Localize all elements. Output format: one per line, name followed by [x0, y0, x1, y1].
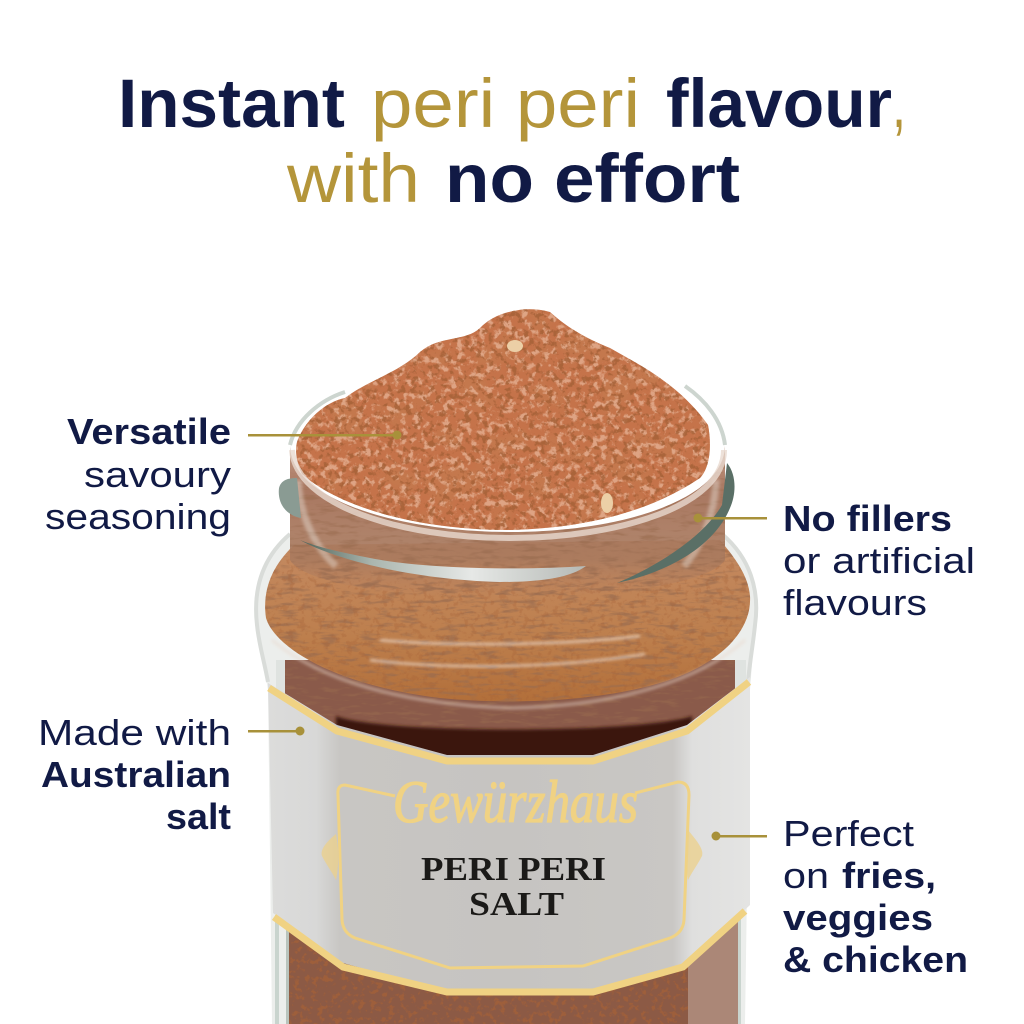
spice mound	[296, 309, 710, 530]
jar neck	[290, 445, 725, 598]
jar label: SALT	[469, 886, 564, 923]
callout: versatile: Versatile	[67, 411, 231, 452]
title: no effort	[445, 140, 740, 217]
spice jar	[250, 309, 770, 1024]
callout: versatile	[45, 411, 402, 537]
callout: no fillers: No fillers	[783, 498, 952, 539]
product name: PERI PERI	[421, 851, 606, 888]
title: with	[286, 140, 420, 217]
callout: versatile: seasoning	[45, 496, 231, 537]
callout: no fillers: flavours	[783, 582, 927, 623]
label ornaments	[322, 830, 702, 880]
label gold bands	[269, 682, 749, 992]
jar label	[268, 677, 750, 992]
callout: versatile: savoury	[84, 454, 231, 495]
title: flavour	[666, 65, 892, 142]
callout: no fillers	[694, 498, 975, 623]
callout: perfect on: on	[783, 855, 829, 896]
callout: no fillers: or artificial	[783, 540, 975, 581]
jar lower body	[250, 530, 770, 1024]
callout: perfect on: Perfect	[783, 813, 914, 854]
neck threads	[279, 463, 735, 583]
title: Instant	[118, 65, 345, 142]
title: ,	[892, 65, 906, 142]
callout: perfect on	[712, 813, 968, 980]
jar glass outline	[256, 534, 756, 708]
callout: australian salt	[38, 712, 304, 837]
back rim	[290, 386, 725, 445]
brand script: Gewürzhaus	[393, 769, 638, 835]
glass rim	[292, 450, 724, 538]
callout: australian salt: Australian	[41, 754, 231, 795]
callout: perfect on: fries,	[842, 855, 936, 896]
callout: perfect on: & chicken	[783, 939, 968, 980]
title: peri peri	[371, 65, 640, 142]
callout: australian salt: salt	[166, 796, 231, 837]
callout: perfect on: veggies	[783, 897, 933, 938]
label inner frame	[338, 782, 689, 968]
callout: australian salt: Made with	[38, 712, 231, 753]
shoulder powder	[265, 540, 750, 701]
title	[118, 65, 906, 217]
